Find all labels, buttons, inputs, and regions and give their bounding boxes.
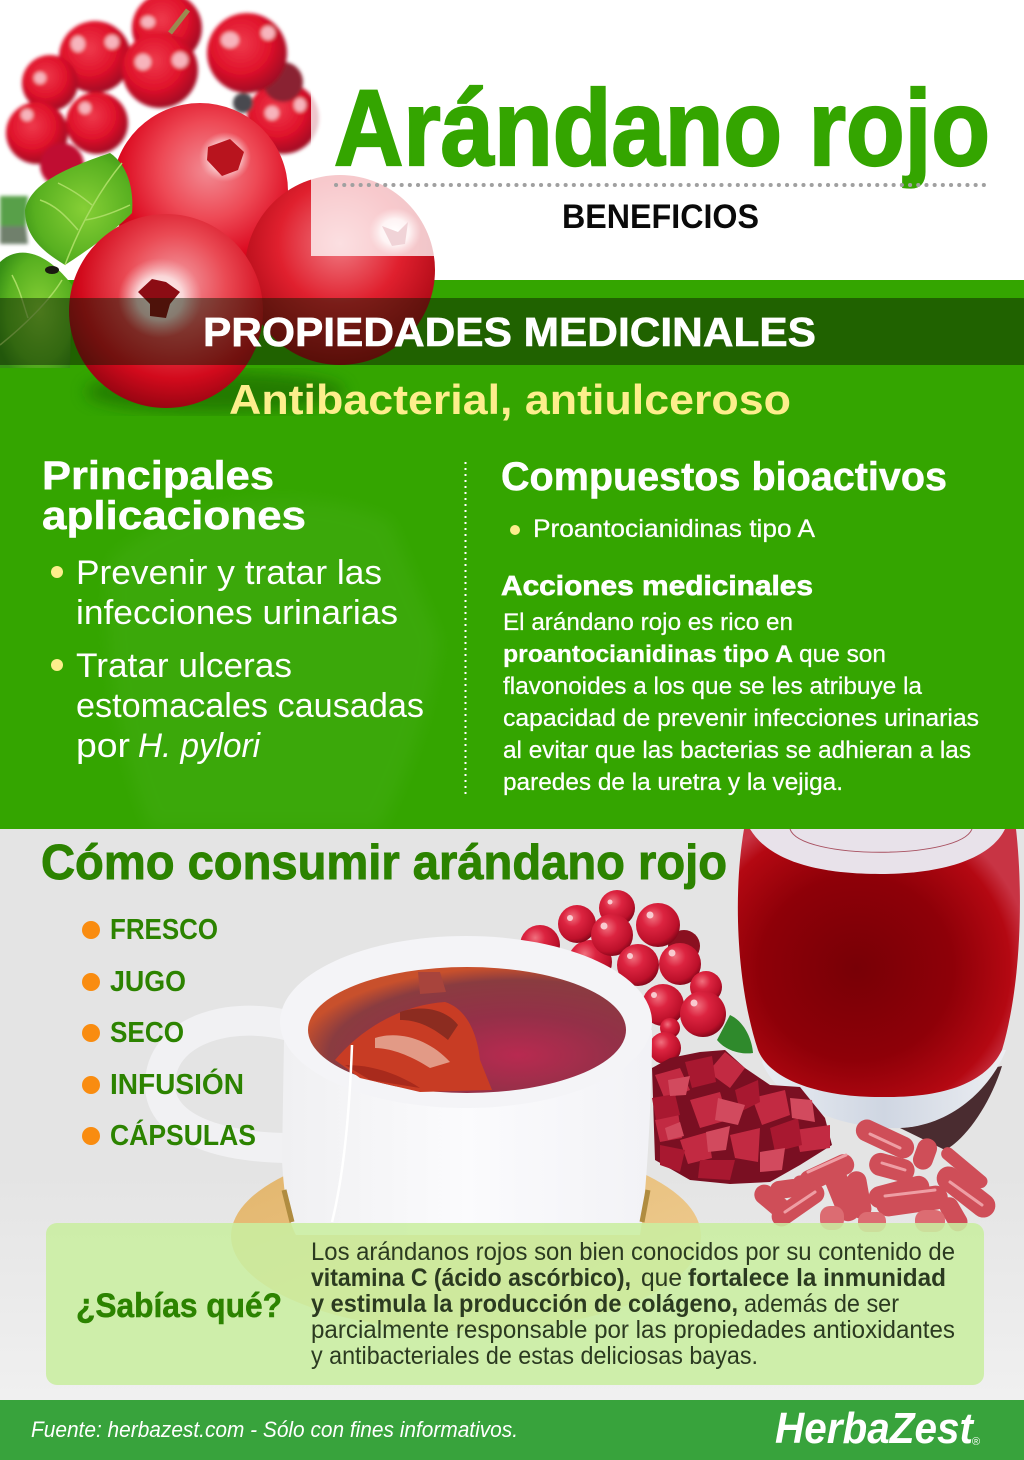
photo: tea cup, berries, dried fruit, juice and capsules <box>160 829 1020 1331</box>
bullet list <box>51 554 424 765</box>
paragraph: capacidad de prevenir infecciones urinarias <box>503 705 979 732</box>
bullet: proantocianidinas: Proantocianidinas tipo A <box>533 515 815 543</box>
logo: HerbaZest: ® <box>972 1436 980 1448</box>
back leaf <box>0 196 28 244</box>
juice glass <box>738 829 1020 1150</box>
list: forms of consumption: CÁPSULAS <box>110 1118 256 1152</box>
band: propiedades medicinales <box>0 298 1024 365</box>
paragraph: que son <box>799 641 886 668</box>
small green leaf <box>717 1015 753 1053</box>
shadow under berries <box>85 372 345 412</box>
callout text: que <box>641 1264 682 1292</box>
logo: HerbaZest: HerbaZest <box>775 1404 975 1453</box>
callout text: además de ser <box>744 1290 899 1318</box>
berry highlights <box>567 900 698 1006</box>
green panel background <box>0 280 1024 829</box>
consumption section background <box>0 829 1024 1400</box>
leaf top <box>25 153 132 265</box>
heading: compuestos bioactivos: Compuestos bioactivos <box>501 455 947 499</box>
callout text: y estimula la producción de colágeno, <box>311 1290 738 1318</box>
heading: acciones medicinales: Acciones medicinales <box>501 570 813 601</box>
capsules <box>750 1116 1000 1235</box>
paragraph: El arándano rojo es rico en <box>503 609 793 636</box>
bullet list: por <box>76 727 130 765</box>
tea bag <box>335 1002 492 1092</box>
berry: right <box>245 175 435 365</box>
paragraph: al evitar que las bacterias se adhieran a las <box>503 737 971 764</box>
callout text: vitamina C (ácido ascórbico), <box>311 1264 631 1292</box>
header background <box>0 0 1024 280</box>
photo: cranberries and leaves <box>0 0 435 412</box>
callout: sabias que <box>46 1223 984 1385</box>
list: forms of consumption: JUGO <box>110 966 186 998</box>
panel: compuestos bioactivos <box>501 455 979 796</box>
cup rim <box>280 936 652 1108</box>
bullet list: infecciones urinarias <box>76 594 398 632</box>
callout heading: ¿Sabías qué? <box>76 1287 282 1325</box>
footer <box>0 1400 1024 1460</box>
berry highlights <box>21 16 306 121</box>
tea bag string <box>332 1045 352 1222</box>
list: forms of consumption <box>82 914 256 1152</box>
paragraph: flavonoides a los que se les atribuye la <box>503 673 923 700</box>
paragraph: paredes de la uretra y la vejiga. <box>503 769 843 796</box>
list: forms of consumption: SECO <box>110 1017 184 1049</box>
panel: principales aplicaciones <box>42 454 424 765</box>
cup handle <box>160 1021 290 1148</box>
paragraph: proantocianidinas tipo A <box>503 641 793 668</box>
heading: principales aplicaciones <box>42 454 306 538</box>
subtitle: BENEFICIOS <box>562 198 759 236</box>
callout text: y antibacteriales de estas deliciosas bayas. <box>311 1342 758 1370</box>
list: forms of consumption: FRESCO <box>110 914 218 946</box>
callout text <box>311 1238 955 1370</box>
blurred background berries <box>6 0 319 187</box>
berry: top <box>112 103 288 279</box>
tea surface <box>308 967 626 1093</box>
fresh berries cluster <box>520 890 726 1064</box>
wooden coaster <box>231 1141 701 1331</box>
list: forms of consumption: INFUSIÓN <box>110 1067 244 1101</box>
source text: Fuente: herbazest.com - Sólo con fines informativos. <box>31 1417 518 1442</box>
tea cup <box>160 936 652 1235</box>
callout text: parcialmente responsable por las propiedades antioxidantes <box>311 1316 955 1344</box>
faded background figure in green panel <box>107 499 440 829</box>
bullet list: estomacales causadas <box>76 687 424 725</box>
white translucent title panel <box>311 70 1024 256</box>
leaf bottom <box>0 253 72 368</box>
band: propiedades medicinales: PROPIEDADES MEDICINALES <box>203 309 816 355</box>
dried cranberries <box>652 1050 832 1184</box>
bullet list: Tratar ulceras <box>76 647 292 685</box>
heading: como consumir: Cómo consumir arándano rojo <box>41 836 727 890</box>
berry: front <box>69 214 263 408</box>
capsule highlights <box>785 1134 982 1212</box>
coaster rim detail <box>284 1190 648 1222</box>
leaf bud <box>45 266 59 274</box>
bullet list: Prevenir y tratar las <box>76 554 382 592</box>
stem <box>170 10 188 33</box>
callout text: fortalece la inmunidad <box>688 1264 946 1292</box>
callout text: Los arándanos rojos son bien conocidos por su contenido de <box>311 1238 955 1266</box>
bullet list: H. pylori <box>138 727 261 765</box>
heading: principales aplicaciones: Principales <box>42 454 274 498</box>
paragraph <box>503 609 979 796</box>
tea bag tag <box>418 972 446 994</box>
subheading: Antibacterial, antiulceroso <box>229 376 791 423</box>
heading: principales aplicaciones: aplicaciones <box>42 494 306 538</box>
